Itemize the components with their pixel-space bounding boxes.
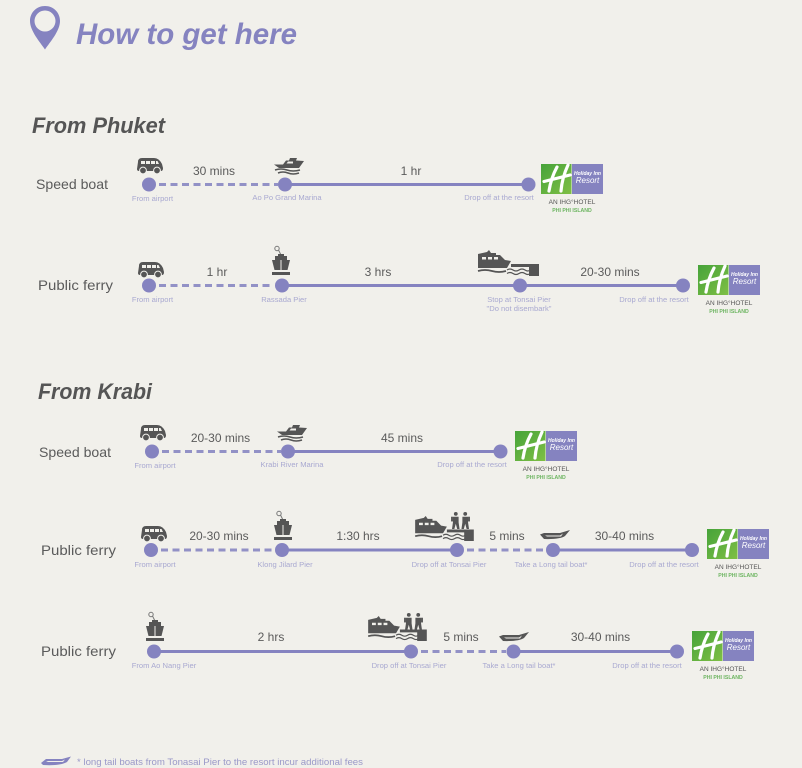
icon: ferry at pier: [415, 516, 474, 541]
route: Krabi speed boat: From airport: [134, 461, 177, 470]
route: Krabi public ferry via Klong Jilard: [41, 511, 700, 569]
icon: van: [140, 425, 166, 441]
route: Krabi public ferry via Klong Jilard: 5 mins: [489, 529, 525, 543]
row label: Public ferry: [41, 542, 116, 558]
route: Krabi public ferry from Ao Nang: Take a Long tail boat*: [482, 661, 556, 670]
logo: Holiday Inn Resort: PHI PHI ISLAND: [709, 309, 749, 315]
logo: Holiday Inn Resort: [541, 164, 603, 214]
route: Phuket public ferry: 1 hr: [207, 265, 227, 279]
icon: long tail boat: [540, 530, 570, 539]
icon: long tail boat: [499, 632, 529, 641]
icon: ferry: [146, 612, 164, 641]
icon: van: [137, 158, 163, 174]
route: Krabi speed boat: Krabi River Marina: [261, 460, 324, 469]
icon: van: [141, 526, 167, 542]
icon: speed boat: [277, 425, 307, 441]
logo: Holiday Inn Resort: [698, 265, 760, 315]
heading: From Phuket: From Phuket: [32, 113, 167, 138]
logo: Holiday Inn Resort: PHI PHI ISLAND: [703, 675, 743, 681]
route: Phuket public ferry: "Do not disembark": [487, 304, 552, 313]
route: Krabi public ferry from Ao Nang: Drop off at Tonsai Pier: [372, 661, 447, 670]
icon: ferry at pier: [478, 250, 539, 276]
route: Krabi public ferry via Klong Jilard: Klong Jilard Pier: [257, 560, 313, 569]
route: Krabi public ferry from Ao Nang: [41, 612, 684, 670]
logo: Holiday Inn Resort: Resort: [550, 443, 574, 452]
icon: walkers: [451, 512, 470, 529]
logo: Holiday Inn Resort: [515, 431, 577, 481]
route: Phuket speed boat: 30 mins: [193, 164, 235, 178]
route: Krabi public ferry via Klong Jilard: From airport: [134, 560, 177, 569]
route: Phuket public ferry: From airport: [132, 295, 174, 304]
logo: Holiday Inn Resort: PHI PHI ISLAND: [718, 573, 758, 579]
heading: From Krabi: From Krabi: [38, 379, 153, 404]
route: Krabi public ferry from Ao Nang: Drop off at the resort: [612, 661, 683, 670]
logo: Holiday Inn Resort: AN IHG°HOTEL: [523, 465, 570, 473]
route: Krabi public ferry from Ao Nang: 5 mins: [443, 630, 479, 644]
logo: Holiday Inn Resort: AN IHG°HOTEL: [700, 665, 747, 673]
logo: Holiday Inn Resort: Resort: [733, 277, 757, 286]
logo: Holiday Inn Resort: Resort: [576, 176, 600, 185]
route: Phuket speed boat: From airport: [132, 194, 174, 203]
route: Phuket speed boat: Ao Po Grand Marina: [252, 193, 322, 202]
route: Krabi public ferry from Ao Nang: 30-40 mins: [571, 630, 630, 644]
row label: Public ferry: [38, 277, 113, 293]
logo: Holiday Inn Resort: AN IHG°HOTEL: [715, 563, 762, 571]
route: Phuket speed boat: 1 hr: [401, 164, 421, 178]
logo: Holiday Inn Resort: PHI PHI ISLAND: [526, 475, 566, 481]
route: Krabi public ferry via Klong Jilard: Take a Long tail boat*: [514, 560, 588, 569]
icon: walkers: [404, 613, 423, 630]
route: Phuket public ferry: 3 hrs: [365, 265, 391, 279]
icon: speed boat: [274, 158, 304, 174]
logo: Holiday Inn Resort: PHI PHI ISLAND: [552, 208, 592, 214]
logo: Holiday Inn Resort: [692, 631, 754, 681]
route: Krabi speed boat: 20-30 mins: [191, 431, 250, 445]
logo: Holiday Inn Resort: Holiday Inn: [574, 171, 601, 177]
logo: Holiday Inn Resort: Resort: [727, 643, 751, 652]
logo: Holiday Inn Resort: Resort: [742, 541, 766, 550]
route: Krabi public ferry from Ao Nang: From Ao Nang Pier: [132, 661, 197, 670]
route: Krabi speed boat: Drop off at the resort: [437, 460, 508, 469]
route: Krabi speed boat: 45 mins: [381, 431, 423, 445]
icon: location pin: [30, 6, 60, 50]
route: Phuket speed boat: [36, 158, 536, 203]
logo: Holiday Inn Resort: Holiday Inn: [725, 638, 752, 644]
logo: Holiday Inn Resort: AN IHG°HOTEL: [706, 299, 753, 307]
icon: footnote long tail boat: [41, 756, 71, 765]
logo: Holiday Inn Resort: Holiday Inn: [548, 438, 575, 444]
route: Phuket public ferry: Stop at Tonsai Pier: [487, 295, 551, 304]
route: Phuket public ferry: [38, 246, 690, 313]
logo: Holiday Inn Resort: Holiday Inn: [731, 272, 758, 278]
logo: Holiday Inn Resort: [707, 529, 769, 579]
row label: Public ferry: [41, 643, 116, 659]
logo: Holiday Inn Resort: AN IHG°HOTEL: [549, 198, 596, 206]
route: Phuket public ferry: 20-30 mins: [580, 265, 640, 279]
route: Phuket public ferry: Drop off at the resort: [619, 295, 690, 304]
route: Krabi public ferry from Ao Nang: 2 hrs: [258, 630, 284, 644]
icon: ferry at pier: [368, 616, 427, 641]
route: Krabi public ferry via Klong Jilard: 20-30 mins: [189, 529, 249, 543]
icon: ferry: [272, 246, 290, 275]
footnote: * long tail boats from Tonasai Pier to the resort incur additional fees: [77, 757, 363, 768]
route: Phuket speed boat: Drop off at the resort: [464, 193, 535, 202]
row label: Speed boat: [39, 444, 111, 460]
icon: ferry: [274, 511, 292, 540]
route: Krabi public ferry via Klong Jilard: Drop off at Tonsai Pier: [412, 560, 487, 569]
icon: van: [138, 262, 164, 278]
route: Krabi public ferry via Klong Jilard: 30-40 mins: [595, 529, 654, 543]
logo: Holiday Inn Resort: Holiday Inn: [740, 536, 767, 542]
row label: Speed boat: [36, 176, 108, 192]
route: Phuket public ferry: Rassada Pier: [261, 295, 307, 304]
route: Krabi speed boat: [39, 425, 508, 470]
route: Krabi public ferry via Klong Jilard: Drop off at the resort: [629, 560, 700, 569]
title: How to get here: [76, 18, 297, 51]
route: Krabi public ferry via Klong Jilard: 1:30 hrs: [336, 529, 380, 543]
